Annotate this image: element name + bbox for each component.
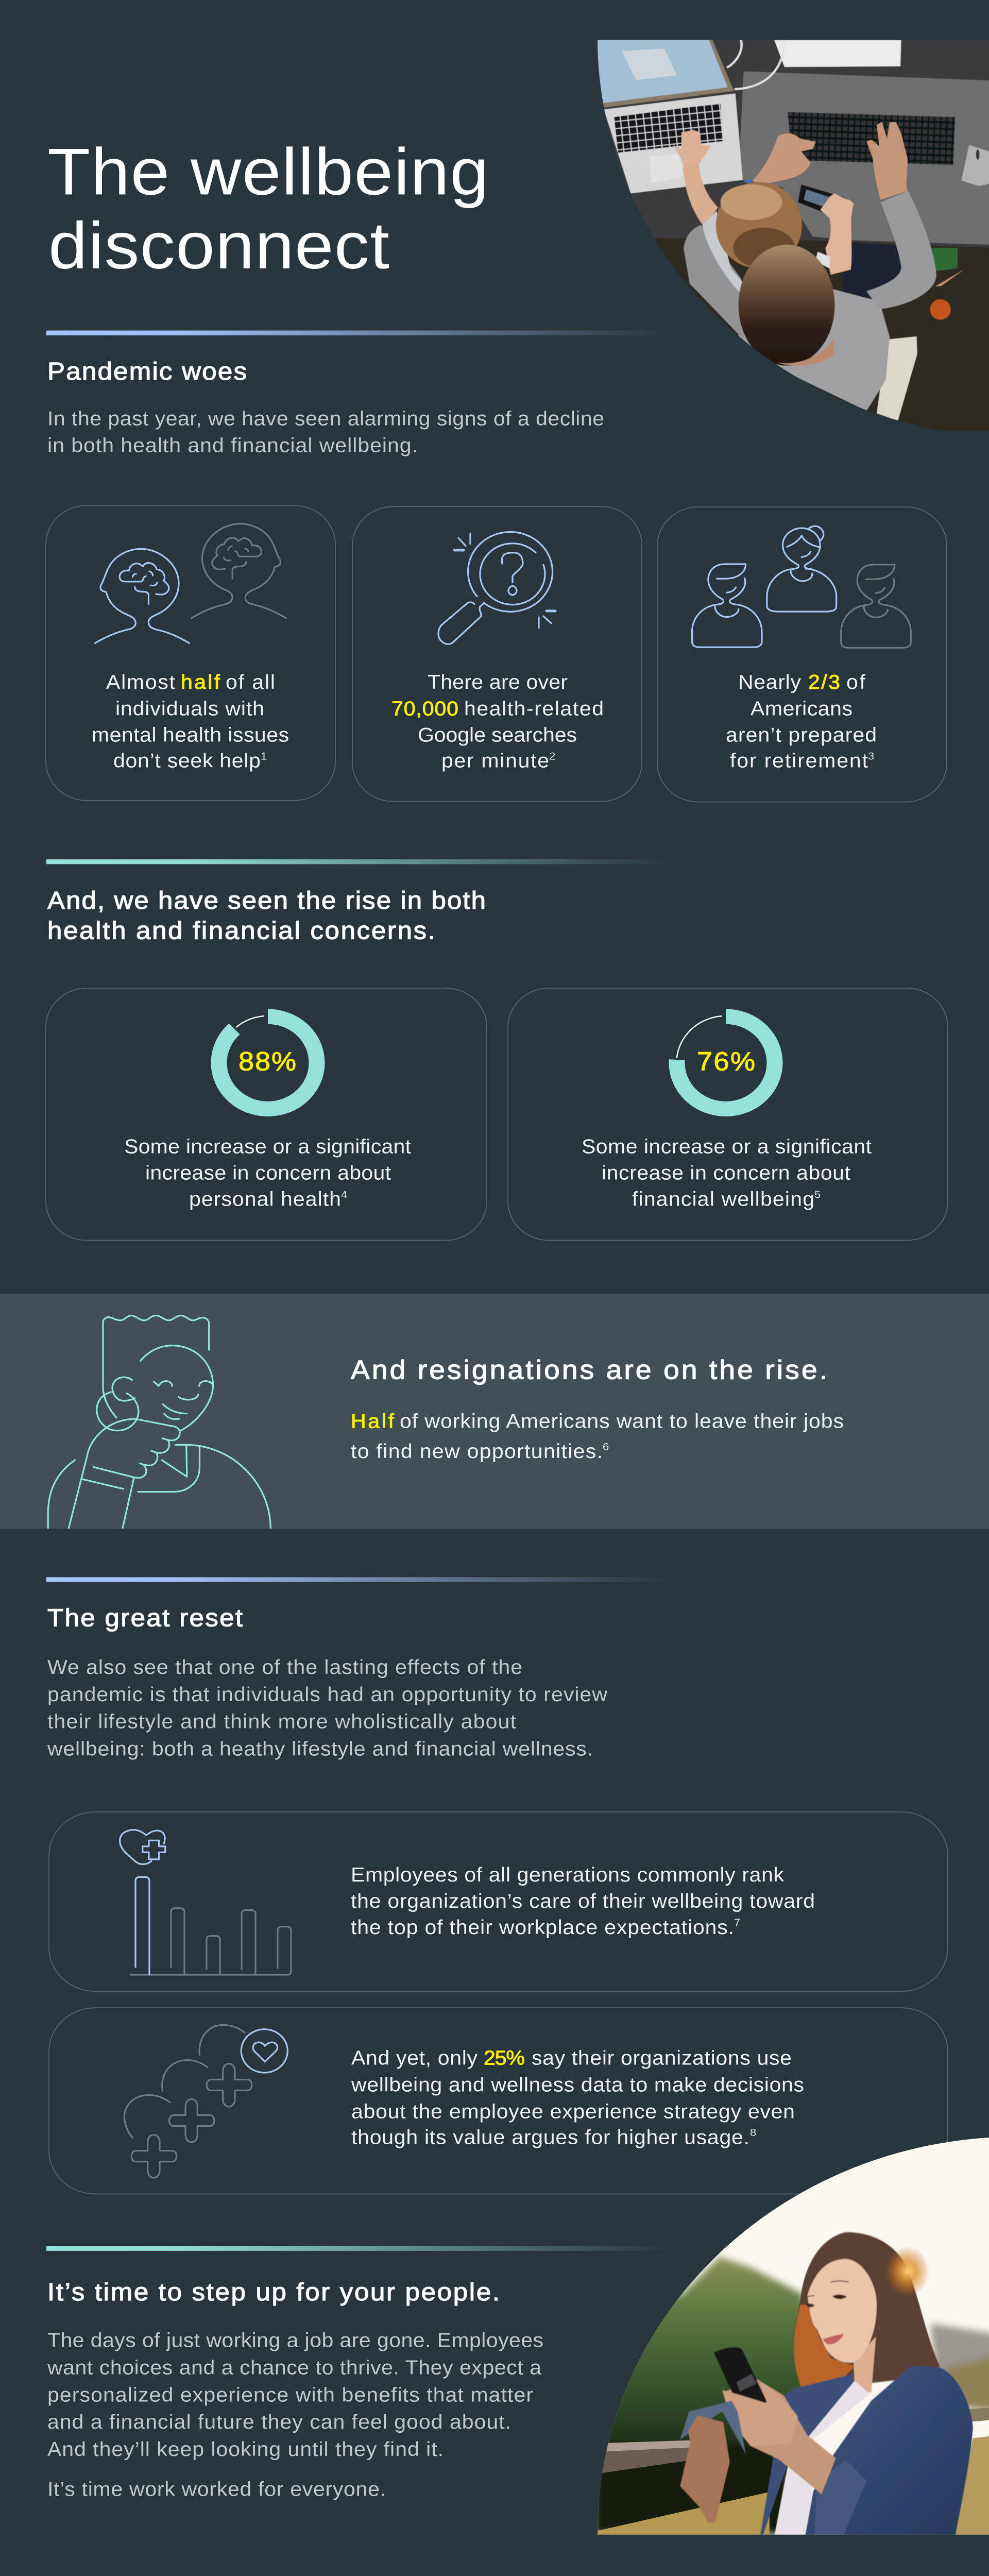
sweater (739, 289, 890, 411)
title: The wellbeing (47, 135, 489, 209)
stat text: 70,000 searches: 70,000 (391, 698, 458, 720)
child head (716, 182, 802, 268)
stat text: 2/3 unprepared: Nearly (738, 671, 801, 693)
icon: person resting chin on hand (48, 1315, 270, 1529)
caption: personal health: increase in concern about (145, 1162, 391, 1184)
icon: pluses and heart circle (124, 2025, 287, 2178)
stat text: 2/3 unprepared (726, 671, 877, 772)
neck and face (854, 2337, 876, 2393)
text: only 25% use data: say their organizations use (532, 2047, 792, 2069)
intro text: the great reset (47, 1656, 607, 1760)
intro text: the great reset: wellbeing: both a heathy lifestyle and financial wellness. (47, 1738, 593, 1760)
caption: financial wellbeing (582, 1136, 872, 1210)
closing text: It’s time work worked for everyone. (47, 2478, 386, 2500)
icon: three people (692, 526, 911, 648)
heading: rise in concerns: health and financial concerns. (47, 917, 435, 944)
caption: personal health: 4 (341, 1189, 347, 1200)
adult hands (753, 133, 816, 185)
caption: personal health: personal health (189, 1189, 341, 1210)
intro text: the great reset: pandemic is that individuals had an opportunity to review (47, 1684, 607, 1706)
stat text: 70,000 searches (391, 671, 604, 772)
title: disconnect (48, 209, 389, 283)
text: employees rank wellbeing: the organization’s care of their wellbeing toward (351, 1890, 815, 1912)
heading: pandemic woes: Pandemic woes (47, 357, 247, 385)
caption: financial wellbeing: Some increase or a significant (582, 1136, 872, 1158)
icon: two heads with brains (95, 524, 286, 643)
panel: workplace expectations (49, 1812, 948, 1991)
stat text: half seek no help: don’t seek help (113, 750, 261, 772)
text: only 25% use data: wellbeing and wellness data to make decisions (351, 2074, 804, 2096)
stat text: 2/3 unprepared: of (846, 671, 866, 693)
stat text: half seek no help (92, 671, 289, 772)
caption: financial wellbeing: financial wellbeing (632, 1189, 814, 1210)
caption: financial wellbeing: 5 (814, 1189, 821, 1200)
donut chart: 88%: 88% (238, 1047, 296, 1076)
section rule: blue (46, 1577, 670, 1582)
stat text: 70,000 searches: Google searches (418, 724, 577, 746)
heading: step up: It’s time to step up for your people. (47, 2278, 500, 2306)
title (47, 135, 489, 283)
icon: magnifying glass (438, 532, 555, 644)
intro text: the great reset: their lifestyle and think more wholistically about (47, 1711, 516, 1733)
closing text: And they’ll keep looking until they find it. (47, 2438, 444, 2461)
closing text (47, 2330, 543, 2500)
icon: bar chart with heart (120, 1830, 291, 1975)
stat text: half seek no help: individuals with (115, 698, 264, 720)
heading: rise in concerns: And, we have seen the rise in both (47, 886, 486, 914)
intro text: pandemic woes: In the past year, we have seen alarming signs of a decline (47, 408, 604, 430)
adult head (739, 245, 835, 366)
heading: resignations: And resignations are on the rise. (351, 1355, 827, 1385)
closing text: The days of just working a job are gone. Employees (47, 2330, 543, 2351)
photo: parent and child working at desk (587, 24, 989, 431)
text: only 25% use data: 8 (750, 2127, 756, 2139)
stat text: half seek no help: of all (226, 671, 275, 693)
text: employees rank wellbeing: the top of their workplace expectations. (351, 1917, 734, 1939)
stat text: half seek no help: mental health issues (92, 724, 289, 746)
text: half want to leave: 6 (603, 1441, 609, 1453)
text: only 25% use data: about the employee experience strategy even (351, 2100, 795, 2123)
stat text: 70,000 searches: 2 (549, 750, 555, 762)
stat text: 2/3 unprepared: 2/3 (808, 671, 840, 693)
text: employees rank wellbeing: Employees of all generations commonly rank (351, 1864, 784, 1886)
heading: the great reset: The great reset (47, 1604, 243, 1632)
photo: woman looking at phone at sunset (594, 2129, 989, 2545)
stat text: half seek no help: Almost (106, 671, 175, 693)
forearm and hand (725, 2379, 835, 2494)
stat text: 2/3 unprepared: aren’t prepared (726, 724, 877, 746)
panel: financial wellbeing donut (508, 988, 948, 1241)
panel: personal health donut (46, 988, 487, 1241)
text: employees rank wellbeing: 7 (734, 1917, 740, 1929)
railing (602, 2440, 690, 2473)
jacket (805, 2366, 973, 2537)
section rule: blue (46, 331, 670, 335)
stat text: 70,000 searches: health-related (464, 698, 604, 720)
caption: financial wellbeing: increase in concern about (602, 1162, 850, 1184)
stat text: 2/3 unprepared: Americans (751, 698, 852, 720)
donut chart: 76% (677, 1016, 775, 1109)
intro text: the great reset: We also see that one of the lasting effects of the (47, 1656, 522, 1679)
text: half want to leave: of working Americans want to leave their jobs (400, 1411, 844, 1432)
hair (795, 2231, 940, 2388)
text: only 25% use data: though its value argues for higher usage. (351, 2126, 749, 2148)
caption: personal health (124, 1136, 411, 1210)
text: half want to leave (351, 1411, 844, 1463)
donut chart: 76%: 76% (697, 1047, 755, 1076)
stat text: half seek no help: half (181, 671, 220, 693)
panel: wellbeing data usage (49, 2008, 948, 2194)
stat text: 2/3 unprepared: for retirement (730, 750, 868, 772)
heading: rise in concerns (47, 886, 486, 944)
donut chart: 88% (219, 1016, 317, 1109)
section rule: teal (46, 2246, 670, 2251)
intro text: pandemic woes (47, 408, 604, 456)
text: employees rank wellbeing (351, 1864, 815, 1939)
caption: personal health: Some increase or a significant (124, 1136, 411, 1158)
closing text: personalized experience with benefits that matter (47, 2384, 533, 2406)
text: half want to leave: to find new opportunities. (351, 1440, 603, 1463)
intro text: pandemic woes: in both health and financial wellbeing. (47, 434, 418, 456)
text: only 25% use data: 25% (484, 2047, 525, 2069)
leaning arm (680, 2401, 746, 2454)
stat text: 70,000 searches: There are over (428, 671, 568, 693)
stat text: 70,000 searches: per minute (441, 750, 549, 772)
closing text: want choices and a chance to thrive. They expect a (47, 2357, 542, 2379)
panel: retirement stat (657, 507, 947, 802)
stat text: 2/3 unprepared: 3 (868, 750, 874, 762)
panel: google searches stat (352, 506, 642, 802)
shirt (774, 2381, 870, 2537)
child arm (683, 162, 718, 228)
text: half want to leave: Half (351, 1411, 395, 1432)
panel: resignations band (0, 1294, 989, 1529)
panel: mental health stat (46, 505, 335, 801)
closing text: and a financial future they can feel good about. (47, 2411, 511, 2433)
section rule: teal (46, 859, 670, 864)
stat text: half seek no help: 1 (261, 750, 267, 762)
text: only 25% use data (351, 2047, 804, 2148)
text: only 25% use data: And yet, only (351, 2047, 478, 2069)
